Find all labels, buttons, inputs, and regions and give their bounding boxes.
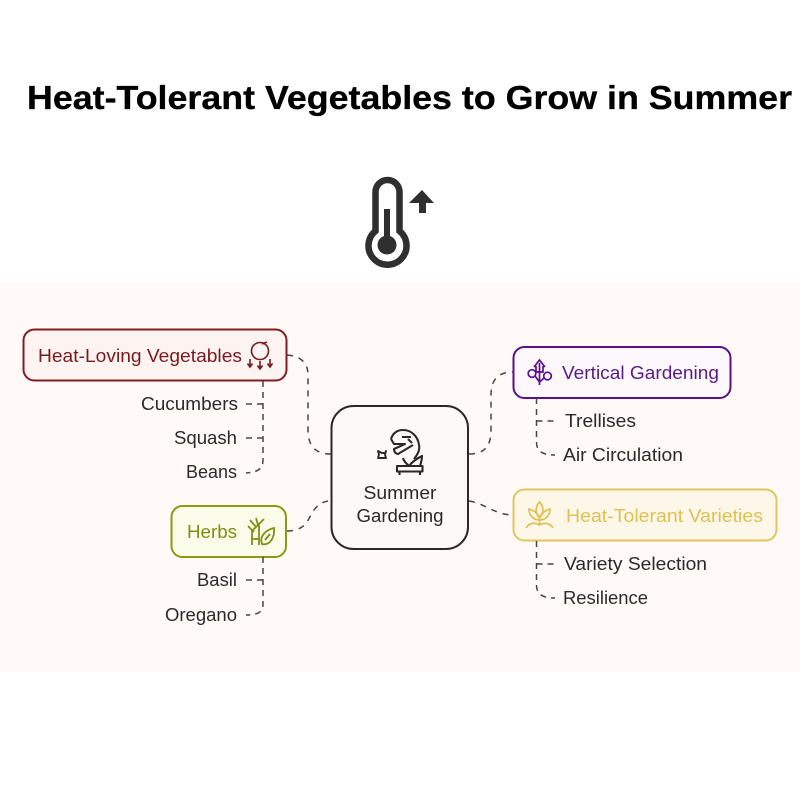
list: vertical gardening: Air Circulation (563, 445, 683, 465)
label: Heat-Tolerant Varieties: Heat-Tolerant Varieties (566, 506, 763, 526)
list: vegetables (141, 381, 263, 482)
list: herbs (165, 557, 263, 625)
list: herbs: Oregano (165, 605, 237, 625)
list: vegetables: Beans (186, 462, 237, 482)
connectors: center to branches (287, 355, 513, 531)
list: varieties: Variety Selection (564, 554, 707, 574)
icon: climbing flowers (528, 360, 551, 385)
panel: Summer Gardening: Gardening (356, 506, 444, 526)
icon: fruit with arrows (248, 342, 272, 369)
title: Heat-Tolerant Vegetables to Grow in Summer (27, 79, 792, 116)
icon: sprout (526, 502, 553, 528)
icon: herbs and leaf (248, 518, 274, 545)
panel: Summer Gardening (332, 406, 468, 549)
panel: Vertical Gardening (514, 347, 730, 398)
label: Herbs: Herbs (187, 522, 237, 542)
icon: plant in pot (378, 430, 422, 475)
label: Heat-Loving Vegetables: Heat-Loving Vegetables (38, 346, 242, 366)
list: vegetables: Cucumbers (141, 394, 238, 414)
list: herbs: Basil (197, 570, 237, 590)
label: Vertical Gardening: Vertical Gardening (562, 363, 719, 383)
list: vertical gardening (536, 398, 683, 465)
background panel (0, 283, 800, 672)
icon: thermometer with up arrow (368, 180, 434, 265)
panel: Heat-Tolerant Varieties (514, 490, 776, 540)
label: Summer Gardening: Summer (364, 483, 436, 503)
list: vegetables: Squash (174, 428, 237, 448)
list: varieties (536, 541, 707, 608)
panel: Heat-Loving Vegetables (24, 330, 286, 380)
list: varieties: Resilience (563, 588, 648, 608)
panel: Herbs (172, 506, 286, 557)
list: vertical gardening: Trellises (565, 411, 636, 431)
